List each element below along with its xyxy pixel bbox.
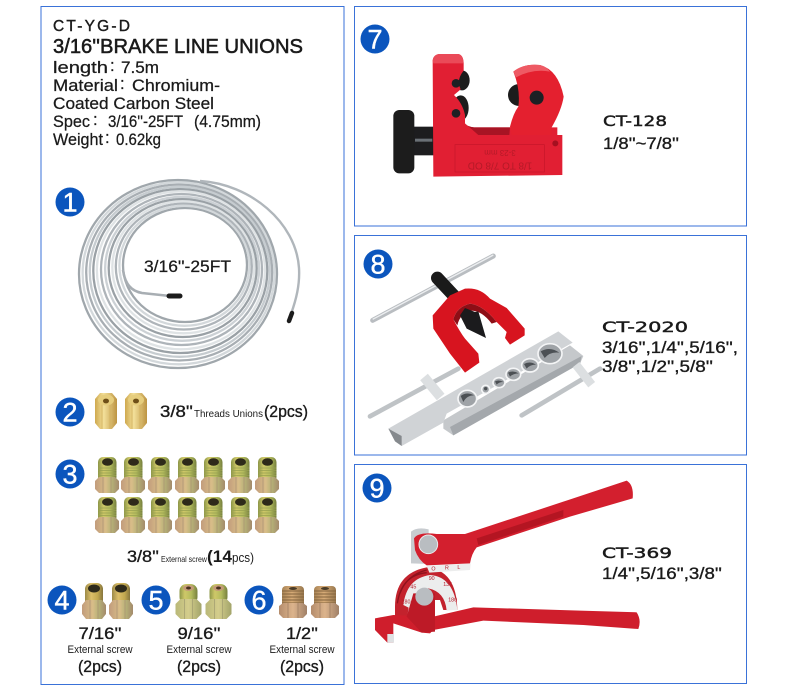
image: tube cutter: 1/8 TO 7/8 OD (468, 160, 532, 171)
badge 7 (360, 24, 390, 54)
image: tube bender: L (457, 565, 460, 571)
badge 5: 5 (148, 586, 164, 616)
badge 3: 3 (62, 460, 78, 490)
image: tube bender: 45 (410, 584, 416, 590)
panel: tube cutter (354, 6, 746, 226)
specifications: length (53, 59, 108, 77)
label: 9/16: External screw (166, 644, 232, 656)
image: tube bender: 180 (448, 598, 457, 604)
panel: kit contents (41, 6, 344, 684)
specifications: 0.62kg (116, 131, 161, 149)
badge 1: 1 (62, 188, 78, 218)
image: tube bender: R (445, 566, 449, 572)
label: 1/2: External screw (270, 644, 335, 656)
image: tube bender: 135 (443, 582, 452, 588)
badge 9 (362, 474, 392, 504)
label: external screw 14 pcs (127, 548, 254, 566)
image: 7/16 fittings (82, 583, 133, 619)
badge 2: 2 (62, 398, 78, 428)
label: cutter model (603, 114, 679, 153)
label: 9/16: 9/16'' (178, 625, 220, 643)
label: threads unions: (2pcs) (264, 403, 308, 421)
image: tube bender: 90 (429, 576, 435, 582)
label: external screw 14 pcs: 3/8'' (127, 548, 159, 566)
label: bender model: 1/4'',5/16'',3/8'' (602, 565, 722, 583)
panel: flaring tool (354, 236, 746, 455)
badge 6 (244, 586, 274, 616)
image: brake line coil (79, 180, 299, 368)
badge 7: 7 (367, 24, 383, 54)
image: tube bender (375, 481, 640, 643)
label: threads unions: 3/8'' (160, 403, 193, 421)
specifications: : (120, 75, 125, 93)
badge 2 (56, 398, 84, 428)
model code: CT-YG-D (53, 18, 130, 35)
label: 9/16: (2pcs) (177, 658, 221, 676)
label: threads unions (160, 403, 308, 421)
title: 3/16''BRAKE LINE UNIONS (53, 35, 303, 58)
image: tube cutter (393, 54, 564, 177)
panel: tube bender (354, 464, 746, 684)
specifications: Chromium- (132, 77, 220, 95)
image: external screw fittings (95, 457, 279, 533)
image: tube bender: O (431, 567, 435, 573)
label: bender model (602, 546, 722, 583)
badge 9: 9 (369, 474, 385, 504)
label: external screw 14 pcs: (14 (207, 548, 233, 566)
specifications: : (93, 111, 98, 129)
badge 1 (56, 188, 84, 218)
badge 4: 4 (54, 586, 70, 616)
specifications (53, 57, 261, 149)
label: 9/16 (166, 625, 232, 676)
specifications: Weight (53, 131, 103, 149)
badge 4 (48, 586, 76, 616)
label: 1/2: (2pcs) (280, 658, 324, 676)
label: 7/16: External screw (68, 644, 133, 656)
label: 1/2 (270, 625, 335, 676)
badge 5 (142, 586, 170, 616)
badge 3 (56, 460, 84, 490)
specifications: : (110, 57, 115, 75)
specifications: : (105, 129, 110, 147)
badge 8: 8 (370, 250, 386, 280)
badge 6: 6 (251, 586, 267, 616)
specifications: Coated Carbon Steel (53, 95, 214, 113)
label: external screw 14 pcs: pcs) (232, 550, 254, 565)
label: threads unions: Threads Unions (194, 408, 263, 420)
specifications: 7.5m (121, 59, 159, 77)
image: tube bender: 180 (402, 599, 410, 605)
badge 8 (364, 250, 392, 280)
label: external screw 14 pcs: External screw (161, 554, 208, 564)
label: bender model: CT-369 (602, 546, 672, 562)
label: flaring tool model: 3/8'',1/2'',5/8'' (602, 358, 713, 376)
image: 1/2 fittings (279, 586, 339, 618)
label: flaring tool model: 3/16'',1/4'',5/16'', (602, 339, 738, 357)
label: flaring tool model: CT-2020 (602, 320, 688, 336)
specifications: Spec (53, 113, 90, 131)
image: flaring tool (370, 255, 600, 446)
image: 9/16 fittings (176, 584, 232, 619)
image: tube cutter: 3-23 mm (484, 148, 516, 157)
label: cutter model: CT-128 (603, 114, 667, 130)
label: 7/16: (2pcs) (78, 658, 122, 676)
specifications: (4.75mm) (194, 113, 261, 131)
label: 7/16: 7/16'' (78, 625, 122, 643)
specifications: Material (53, 77, 118, 95)
coil label: 3/16''-25FT (144, 258, 231, 276)
image: brass unions (95, 393, 147, 429)
label: cutter model: 1/8''~7/8'' (603, 135, 679, 153)
label: 7/16 (68, 625, 133, 676)
specifications: 3/16''-25FT (108, 113, 183, 131)
label: flaring tool model (602, 320, 738, 376)
label: 1/2: 1/2'' (286, 625, 318, 643)
